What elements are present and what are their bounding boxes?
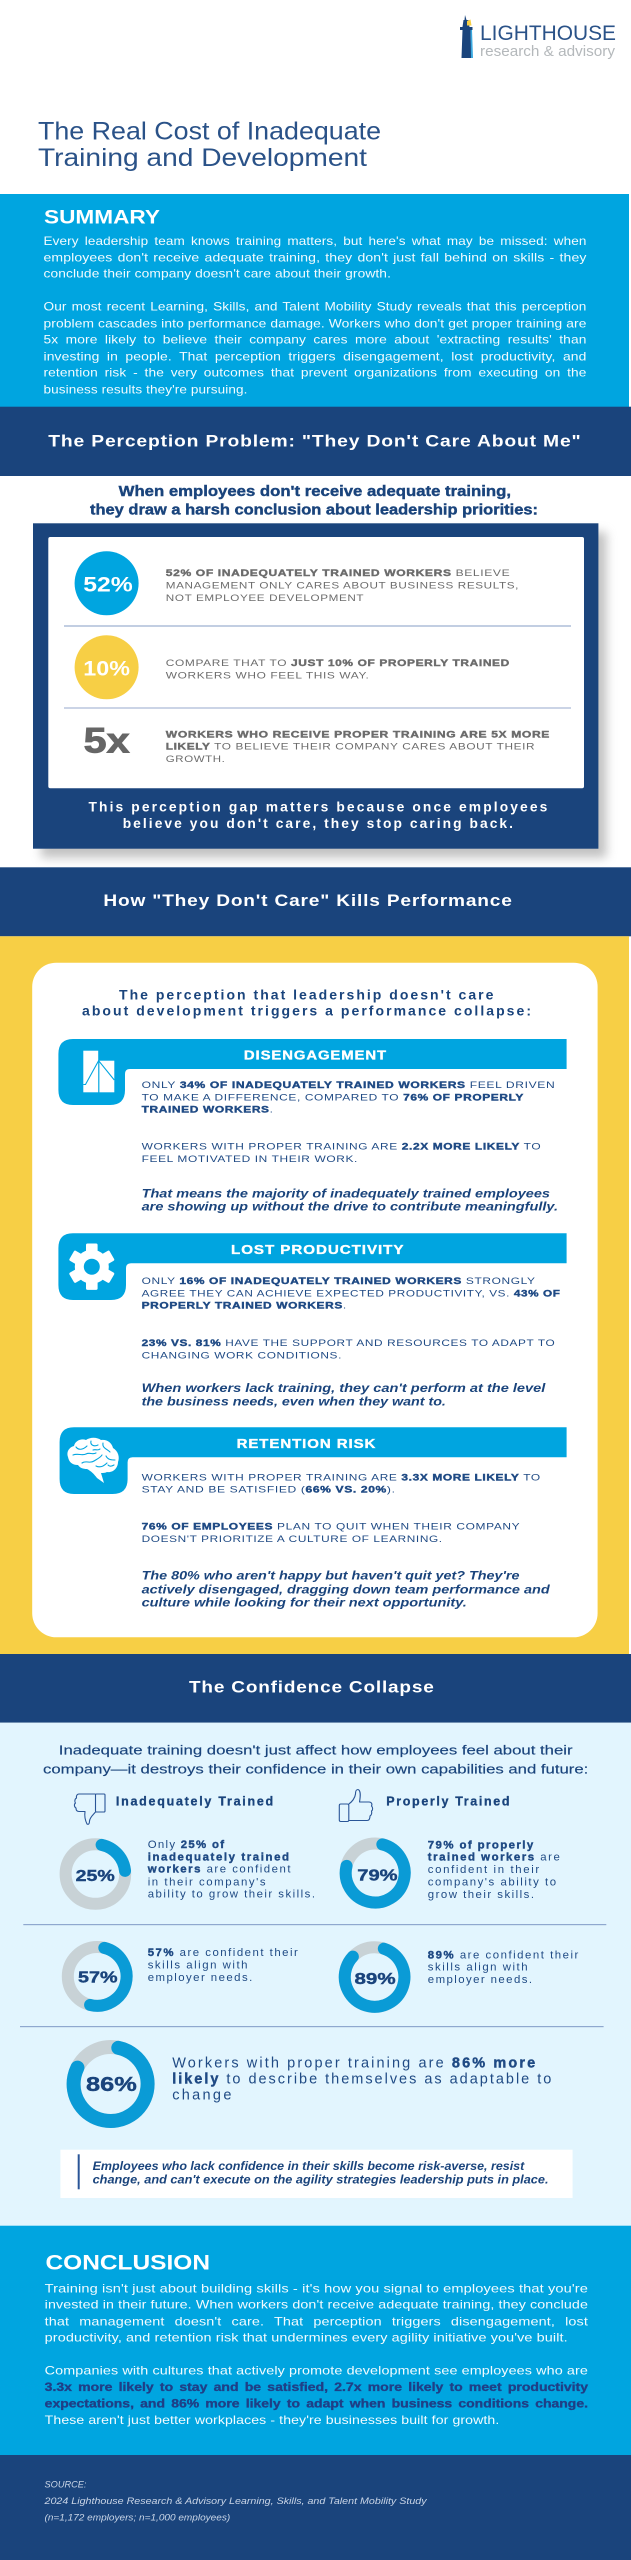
heading: summary: SUMMARY [44,207,160,228]
text block: productivity stats: PROPERLY TRAINED WORKERS . [142,1301,347,1312]
banner: retention risk [60,1427,567,1494]
text block: disengagement stats: ONLY 34% OF INADEQUATELY TRAINED WORKERS FEEL DRIVEN [142,1080,555,1091]
donut stat: 89%: 89% [354,1971,396,1988]
donut stat: 25% [60,1839,315,1909]
stat: 5x: WORKERS WHO RECEIVE PROPER TRAINING ARE 5X MORE [166,729,550,740]
icon: lighthouse [460,15,473,58]
icon: bar chart [83,1051,114,1092]
subheading: harsh conclusion: When employees don't receive adequate training, [119,483,511,500]
text block: retention stats: STAY AND BE SATISFIED ( 66% VS. 20% ). [142,1485,396,1496]
footer: source [0,2455,631,2560]
text block: productivity stats: CHANGING WORK CONDITIONS. [142,1350,342,1361]
title: The Real Cost of Inadequate [38,118,381,145]
stat: 5x: 5x [84,722,130,761]
panel: performance collapse [0,936,629,1654]
block: lost productivity [58,1233,567,1409]
donut stat: 57%: employer needs. [148,1972,252,1984]
text block: summary body: problem cascades into performance damage. Workers who don't get proper training are [44,316,587,330]
callout: risk-averse [60,2150,573,2198]
icon: thumbs up [339,1790,373,1822]
donut stat: 86%: 86% [86,2074,137,2096]
text block: summary body: investing in people. That perception triggers disengagement, lost productivity, and [44,349,586,363]
text block: conclusion body: productivity, and retention risk that undermines every agility initiative you've built. [45,2331,568,2345]
text block: productivity stats: ONLY 16% OF INADEQUATELY TRAINED WORKERS STRONGLY [142,1276,536,1287]
section header: kills performance: How "They Don't Care" Kills Performance [103,892,513,910]
text block: summary body: conclude their company doesn't care about their growth. [44,267,391,281]
callout: risk-averse: change, and can't execute on the agility strategies leadership puts in place. [93,2173,548,2187]
callout: perception gap [88,800,548,831]
text block: summary body [44,234,587,396]
callout: perception gap: believe you don't care, they stop caring back. [123,816,513,831]
text block: disengagement stats [142,1080,558,1214]
block: retention risk [60,1427,567,1610]
stat: 5x: GROWTH. [166,754,225,765]
title: Training and Development [38,145,367,172]
donut stat: 79%: trained workers are [428,1852,560,1864]
block: retention risk: RETENTION RISK [237,1436,376,1451]
footer: source: SOURCE: [44,2479,87,2490]
donut stat: 79%: company's ability to [428,1877,556,1889]
donut stat: 25%: inadequately trained [148,1851,289,1863]
banner: lost productivity [58,1233,567,1300]
section header: perception problem: The Perception Problem: "They Don't Care About Me" [48,433,582,451]
text block: retention stats: WORKERS WITH PROPER TRAINING ARE 3.3X MORE LIKELY TO [142,1472,541,1483]
panel: confidence collapse [0,1723,631,2226]
section header: confidence collapse: The Confidence Collapse [189,1679,435,1697]
donut stat: 86%: likely to describe themselves as adaptable to [172,2071,551,2087]
text block: summary body: 5x more likely to believe their company cares more about 'extracting results' than [44,333,586,347]
donut stat: 79%: grow their skills. [428,1889,534,1901]
text block: disengagement stats: FEEL MOTIVATED IN THEIR WORK. [142,1154,358,1165]
text block: conclusion body: Companies with cultures that actively promote development see employees who are [45,2364,588,2378]
text block: conclusion body: Training isn't just about building skills - it's how you signal to employees that you're [45,2281,588,2295]
donut stat: 79%: 79% [357,1867,398,1884]
column heading: properly trained: Properly Trained [386,1795,510,1809]
subheading: harsh conclusion [90,483,538,518]
donut stat: 89%: skills align with [428,1962,528,1974]
donut stat: 79%: 79% of properly [428,1839,534,1851]
stat: 10% [75,635,510,699]
donut stat: 89%: employer needs. [428,1974,532,1986]
column heading: inadequately trained: Inadequately Trained [116,1795,273,1809]
text block: retention stats: DOESN'T PRIORITIZE A CULTURE OF LEARNING. [142,1534,443,1545]
donut stat: 89% [337,1939,579,2015]
text block: summary body: employees don't receive adequate training, they don't just fall behind on skills - they [44,251,586,265]
donut stat: 25%: Only 25% of [148,1839,224,1851]
logo: Lighthouse Research & Advisory [460,15,616,60]
text block: retention stats: actively disengaged, dragging down team performance and [142,1582,550,1596]
footer: source: 2024 Lighthouse Research & Advisory Learning, Skills, and Talent Mobility Study [43,2496,428,2507]
donut stat: 86%: Workers with proper training are 86% more [172,2055,535,2071]
text block: disengagement stats: are showing up without the drive to contribute meaningfully. [142,1200,558,1214]
text block: summary body: Our most recent Learning, Skills, and Talent Mobility Study reveals that this perception [44,300,586,314]
text block: conclusion body: These aren't just better workplaces - they're businesses built for growth. [45,2413,499,2427]
column heading: properly trained [339,1790,510,1822]
panel: perception stats [33,523,606,858]
text block: confidence intro: company—it destroys their confidence in their own capabilities and future: [43,1761,588,1776]
icon: gear [69,1244,115,1290]
text block: summary body: business results they're pursuing. [44,382,248,396]
footer: source: (n=1,172 employers; n=1,000 employees) [44,2512,230,2523]
callout: perception gap: This perception gap matters because once employees [88,800,548,815]
panel: summary [0,194,629,408]
text block: conclusion body [45,2281,589,2427]
text block: conclusion body: that management doesn't care. That perception triggers disengagement, lost [45,2314,589,2328]
heading: conclusion: CONCLUSION [46,2251,210,2274]
icon: brain [67,1438,119,1483]
donut stat: 89%: 89% are confident their [428,1949,579,1961]
text block: summary body: Every leadership team knows training matters, but here's what may be missed: when [44,234,586,248]
stat: 5x [84,722,550,765]
text block: conclusion body: 3.3x more likely to stay and be satisfied, 2.7x more likely to meet productivity [45,2380,588,2394]
icon: thumbs down [74,1794,105,1824]
donut stat: 25%: workers are confident [147,1864,291,1876]
stat: 52%: MANAGEMENT ONLY CARES ABOUT BUSINESS RESULTS, [166,580,519,591]
block: lost productivity: LOST PRODUCTIVITY [231,1242,404,1257]
heading: performance collapse: about development triggers a performance collapse: [82,1003,531,1019]
donut stat: 86% [67,2040,551,2128]
donut stat: 57% [62,1941,298,2012]
donut stat: 25%: in their company's [148,1876,266,1888]
stat: 10%: COMPARE THAT TO JUST 10% OF PROPERLY TRAINED [166,658,510,669]
text block: retention stats [142,1472,550,1610]
text block: confidence intro [43,1743,588,1776]
text block: productivity stats: AGREE THEY CAN ACHIEVE EXPECTED PRODUCTIVITY, VS. 43% OF [142,1288,561,1299]
section header: perception problem [0,407,631,476]
subheading: harsh conclusion: they draw a harsh conclusion about leadership priorities: [90,501,538,518]
stat: 52%: 52% [83,574,133,597]
text block: retention stats: The 80% who aren't happy but haven't quit yet? They're [142,1569,520,1583]
stat: 52% [75,551,519,615]
banner: disengagement [58,1039,567,1105]
logo: Lighthouse Research & Advisory: research & advisory [480,43,616,60]
title [38,118,381,172]
heading: performance collapse: The perception that leadership doesn't care [119,986,494,1002]
donut stat: 57%: 57% are confident their [148,1947,298,1959]
text block: summary body: retention risk - the very outcomes that prevent organizations from executing on the [44,366,587,380]
callout: risk-averse: Employees who lack confidence in their skills become risk-averse, resist [93,2159,525,2173]
heading: performance collapse [82,986,531,1019]
donut stat: 79% [339,1837,560,1909]
text block: disengagement stats: That means the majority of inadequately trained employees [142,1186,550,1200]
stat: 52%: 52% OF INADEQUATELY TRAINED WORKERS BELIEVE [166,568,510,579]
text block: productivity stats [142,1276,561,1409]
text block: productivity stats: 23% VS. 81% HAVE THE SUPPORT AND RESOURCES TO ADAPT TO [142,1338,555,1349]
stat: 10%: 10% [83,658,130,681]
logo: Lighthouse Research & Advisory: LIGHTHOUSE [480,22,616,45]
text block: confidence intro: Inadequate training doesn't just affect how employees feel about their [59,1743,573,1758]
donut stat: 79%: confident in their [428,1864,539,1876]
text block: disengagement stats: TRAINED WORKERS . [142,1105,274,1116]
donut stat: 25%: ability to grow their skills. [148,1889,315,1901]
panel: conclusion [0,2226,631,2455]
text block: conclusion body: expectations, and 86% more likely to adapt when business conditions change. [45,2396,588,2410]
section header: confidence collapse [0,1654,631,1723]
donut stat: 57%: skills align with [148,1960,248,1972]
text block: retention stats: culture while looking for their next opportunity. [142,1596,467,1610]
block: disengagement: DISENGAGEMENT [244,1047,387,1062]
stat: 5x: LIKELY TO BELIEVE THEIR COMPANY CARES ABOUT THEIR [166,742,535,753]
section header: kills performance [0,867,631,936]
donut stat: 25%: 25% [76,1868,115,1885]
donut stat: 57%: 57% [78,1970,118,1987]
text block: productivity stats: the business needs, even when they want to. [142,1395,446,1409]
donut stat: 86%: change [172,2087,231,2103]
stat: 52%: NOT EMPLOYEE DEVELOPMENT [166,593,364,604]
text block: retention stats: 76% OF EMPLOYEES PLAN TO QUIT WHEN THEIR COMPANY [142,1522,520,1533]
stat: 10%: WORKERS WHO FEEL THIS WAY. [166,670,369,681]
text block: productivity stats: When workers lack training, they can't perform at the level [142,1381,546,1395]
text block: disengagement stats: WORKERS WITH PROPER TRAINING ARE 2.2X MORE LIKELY TO [142,1142,541,1153]
column heading: inadequately trained [74,1794,273,1824]
block: disengagement [58,1039,567,1214]
text block: disengagement stats: TO MAKE A DIFFERENCE, COMPARED TO 76% OF PROPERLY [142,1092,524,1103]
text block: conclusion body: invested in their future. When workers don't receive adequate training, they conclude [45,2298,588,2312]
